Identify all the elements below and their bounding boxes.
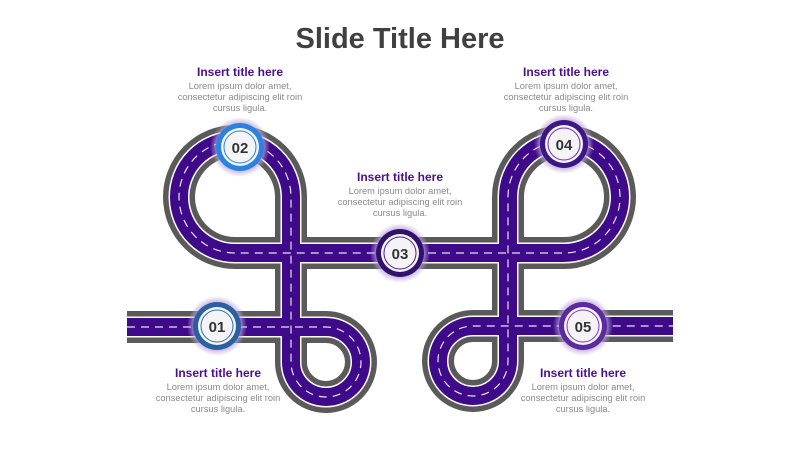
text block 02: cursus ligula.	[213, 103, 267, 113]
text block 03: cursus ligula.	[373, 208, 427, 218]
road: right	[400, 141, 673, 396]
text block 01: Lorem ipsum dolor amet,	[167, 382, 269, 392]
marker 01: 01	[209, 319, 225, 336]
text block 04: Lorem ipsum dolor amet,	[515, 81, 617, 91]
title: Slide Title Here	[296, 23, 504, 55]
text block 04: cursus ligula.	[539, 103, 593, 113]
text block 04: consectetur adipiscing elit roin	[504, 92, 628, 102]
marker 05: 05	[575, 319, 591, 336]
text block 03: consectetur adipiscing elit roin	[338, 197, 462, 207]
text block 01: consectetur adipiscing elit roin	[156, 393, 280, 403]
text block 01: Insert title here	[175, 366, 261, 380]
text block 03: Lorem ipsum dolor amet,	[349, 186, 451, 196]
marker 04	[534, 114, 594, 174]
text block 04: Insert title here	[523, 65, 609, 79]
text block 02: Lorem ipsum dolor amet,	[189, 81, 291, 91]
text block 02	[178, 65, 302, 113]
road: left	[127, 141, 400, 397]
text block 05: Insert title here	[540, 366, 626, 380]
text block 01	[156, 366, 280, 414]
text block 05: consectetur adipiscing elit roin	[521, 393, 645, 403]
text block 01: cursus ligula.	[191, 404, 245, 414]
marker 03: 03	[392, 246, 408, 263]
text block 05	[521, 366, 645, 414]
marker 02: 02	[232, 140, 248, 157]
text block 05: cursus ligula.	[556, 404, 610, 414]
text block 04	[504, 65, 628, 113]
marker 02	[210, 117, 270, 177]
marker 01	[187, 296, 247, 356]
marker 03	[370, 223, 430, 283]
text block 03	[338, 170, 462, 218]
marker 04: 04	[556, 137, 573, 154]
text block 03: Insert title here	[357, 170, 443, 184]
text block 02: Insert title here	[197, 65, 283, 79]
marker 05	[553, 296, 613, 356]
text block 05: Lorem ipsum dolor amet,	[532, 382, 634, 392]
text block 02: consectetur adipiscing elit roin	[178, 92, 302, 102]
